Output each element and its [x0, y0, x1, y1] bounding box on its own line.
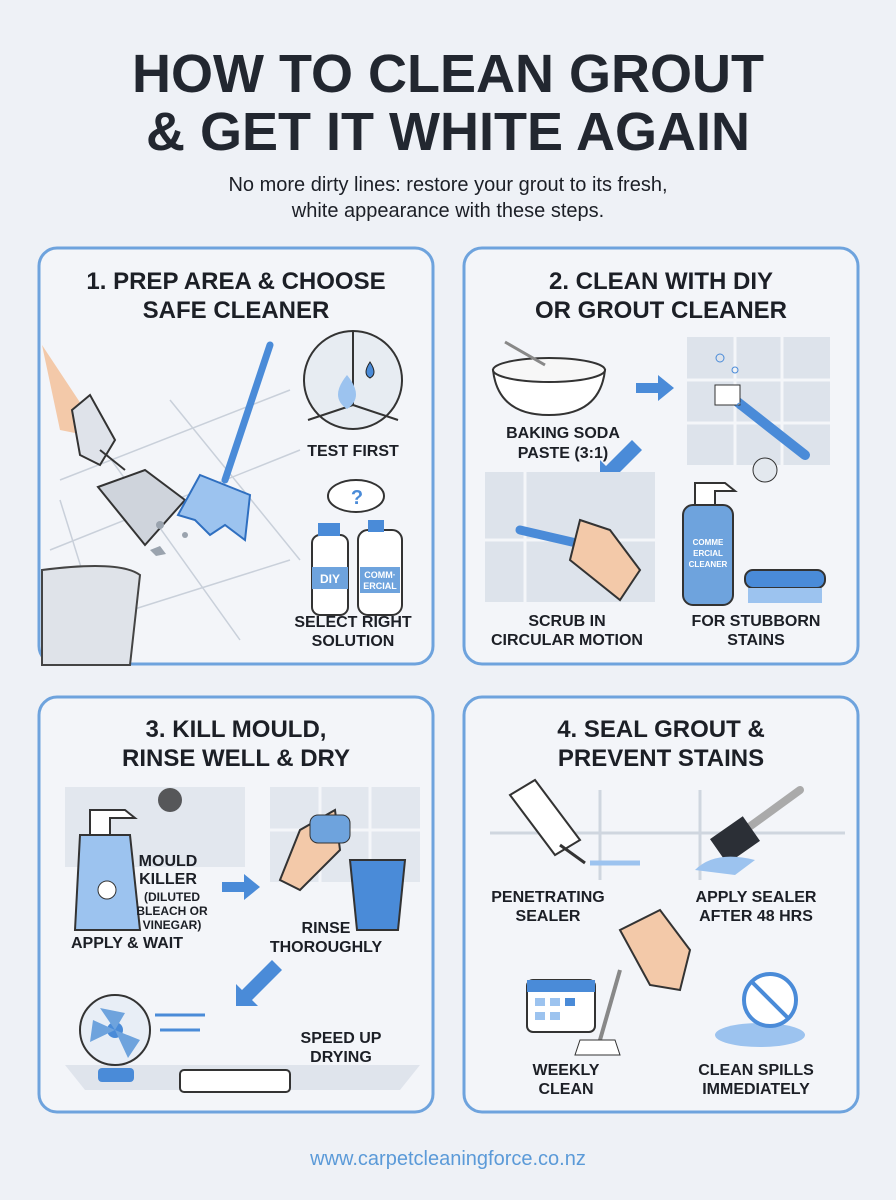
icon: bowl of baking soda	[493, 342, 605, 415]
label: for stubborn stains: FOR STUBBORN	[692, 613, 820, 630]
arrow right	[636, 375, 674, 401]
icon: bottles: DIY	[320, 572, 340, 586]
label: test first: TEST FIRST	[307, 443, 399, 460]
label: speed up drying	[301, 1030, 382, 1066]
label: penetrating sealer: PENETRATING	[491, 889, 605, 906]
heading: step 3	[122, 716, 350, 772]
label: clean spills immediately: CLEAN SPILLS	[698, 1062, 814, 1079]
label: select right solution: SELECT RIGHT	[294, 614, 412, 631]
icon: no spill timer	[715, 974, 805, 1047]
title	[132, 44, 764, 162]
heading: step 1: 1. PREP AREA & CHOOSE	[86, 268, 386, 295]
icon: spray bottle and brush: ERCIAL	[693, 549, 723, 558]
subtitle: No more dirty lines: restore your grout to its fresh,	[228, 174, 668, 196]
illustration: rinse bucket	[270, 787, 420, 930]
label: baking soda paste: BAKING SODA	[506, 425, 620, 442]
label: apply sealer after 48 hrs: AFTER 48 HRS	[699, 908, 813, 925]
heading: step 4: 4. SEAL GROUT &	[557, 716, 765, 743]
label: penetrating sealer: SEALER	[516, 908, 581, 925]
arrow down-left	[600, 440, 642, 482]
label: weekly clean	[533, 1062, 600, 1098]
label: scrub in circular motion: CIRCULAR MOTION	[491, 632, 643, 649]
subtitle: white appearance with these steps.	[291, 200, 604, 222]
panel: step 1	[39, 248, 433, 665]
heading: step 4: PREVENT STAINS	[558, 745, 764, 772]
illustration: wiping cloth	[620, 910, 690, 990]
illustration: toothbrush on tiles	[687, 337, 830, 465]
heading: step 2: 2. CLEAN WITH DIY	[549, 268, 773, 295]
label: clean spills immediately: IMMEDIATELY	[702, 1081, 810, 1098]
label: apply sealer after 48 hrs	[696, 889, 817, 925]
heading: step 2: OR GROUT CLEANER	[535, 297, 787, 324]
label: baking soda paste	[506, 425, 620, 462]
heading: step 4	[557, 716, 765, 772]
illustration: mould killer spray	[65, 787, 245, 930]
heading: step 1: SAFE CLEANER	[143, 297, 329, 324]
label: speed up drying: DRYING	[310, 1049, 372, 1066]
icon: bottles: COMM·	[364, 570, 396, 580]
footer url: www.carpetcleaningforce.co.nz	[309, 1148, 586, 1170]
heading: step 2	[535, 268, 787, 324]
illustration: sweeping	[42, 345, 300, 665]
label: scrub in circular motion: SCRUB IN	[528, 613, 606, 630]
icon: bottles: ?	[351, 487, 363, 509]
title: HOW TO CLEAN GROUT	[132, 44, 764, 104]
label: speed up drying: SPEED UP	[301, 1030, 382, 1047]
icon: calendar and mop	[527, 970, 620, 1055]
heading: step 1	[86, 268, 386, 324]
panel: step 4	[464, 697, 858, 1112]
arrow right	[222, 874, 260, 900]
label: scrub in circular motion	[491, 613, 643, 649]
illustration: scrubbing	[485, 472, 655, 602]
icon: spray bottle and brush	[683, 458, 825, 605]
label: rinse thoroughly: THOROUGHLY	[270, 939, 382, 956]
label: mould killer: (DILUTED	[144, 890, 200, 904]
icon: spray bottle and brush: COMME	[693, 538, 724, 547]
icon: test first	[304, 331, 402, 429]
subtitle	[228, 174, 668, 222]
label: penetrating sealer	[491, 889, 605, 925]
heading: step 3: RINSE WELL & DRY	[122, 745, 350, 772]
label: rinse thoroughly: RINSE	[302, 920, 351, 937]
label: mould killer: KILLER	[139, 871, 197, 888]
label: rinse thoroughly	[270, 920, 382, 956]
label: for stubborn stains: STAINS	[727, 632, 785, 649]
arrow down-left	[236, 960, 282, 1006]
heading: step 3: 3. KILL MOULD,	[146, 716, 326, 743]
label: for stubborn stains	[692, 613, 820, 649]
label: baking soda paste: PASTE (3:1)	[518, 445, 608, 462]
panel: step 2	[464, 248, 858, 664]
illustration: fan drying	[65, 995, 420, 1092]
illustration: sealer bottle	[490, 780, 845, 880]
title: & GET IT WHITE AGAIN	[146, 102, 750, 162]
label: weekly clean: WEEKLY	[533, 1062, 600, 1079]
label: apply & wait: APPLY & WAIT	[71, 935, 183, 952]
label: clean spills immediately	[698, 1062, 814, 1098]
label: select right solution	[294, 614, 412, 650]
label: mould killer: MOULD	[139, 853, 197, 870]
label: mould killer	[136, 853, 208, 932]
panel: step 3	[39, 697, 433, 1112]
label: weekly clean: CLEAN	[538, 1081, 594, 1098]
icon: bottles	[312, 480, 402, 615]
label: mould killer: BLEACH OR	[136, 904, 208, 918]
icon: bottles: ERCIAL	[363, 581, 397, 591]
label: apply sealer after 48 hrs: APPLY SEALER	[696, 889, 817, 906]
label: select right solution: SOLUTION	[312, 633, 394, 650]
label: mould killer: VINEGAR)	[143, 918, 201, 932]
icon: spray bottle and brush: CLEANER	[689, 560, 728, 569]
